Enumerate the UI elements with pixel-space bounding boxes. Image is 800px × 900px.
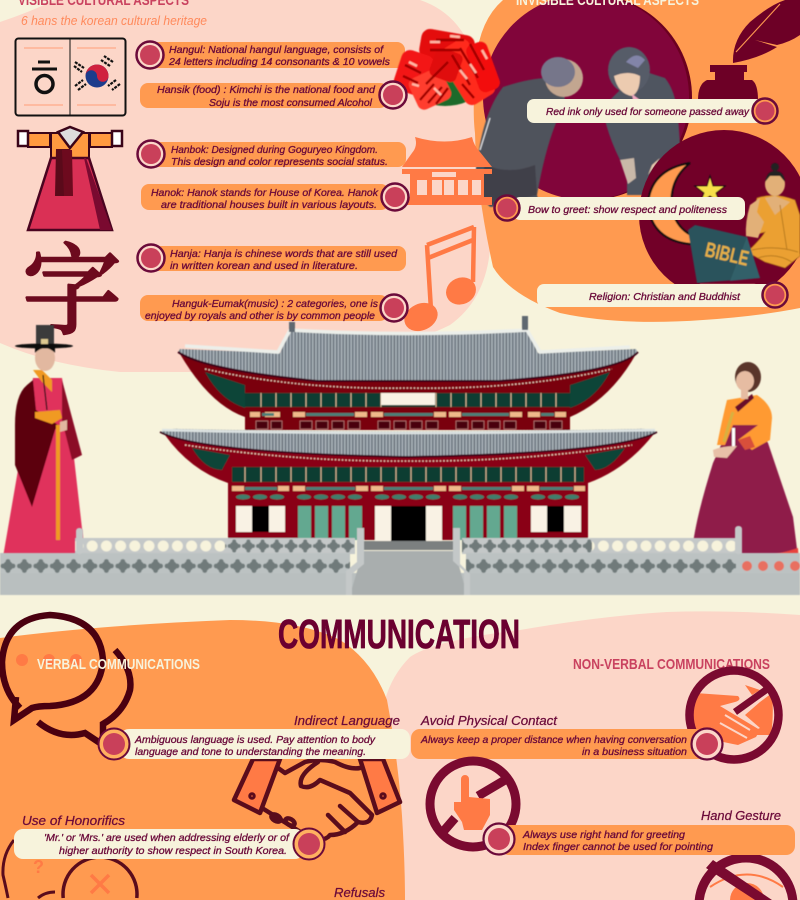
pill: religion bbox=[537, 282, 788, 308]
stair posts bbox=[346, 528, 470, 595]
pill: hanguk-eumak: enjoyed by royals and other is by common people bbox=[145, 310, 375, 322]
pill: hanbok: Hanbok: Designed during Goguryeo Kingdom. bbox=[171, 144, 378, 156]
pill: hanok: are traditional houses built in various layouts. bbox=[161, 199, 377, 211]
lower green frieze bbox=[232, 467, 584, 482]
illustration: woman in hanbok bbox=[690, 362, 799, 566]
pill: hanbok: This design and color represents social status. bbox=[171, 156, 388, 168]
label: use of honorifics: Use of Honorifics bbox=[22, 813, 126, 828]
illustration: man in traditional robe bbox=[3, 325, 85, 570]
upper under-eave bbox=[180, 354, 636, 430]
pill: hanok: Hanok: Hanok stands for House of Korea. Hanok bbox=[151, 187, 379, 199]
upper sign bbox=[381, 393, 435, 405]
icon: question bubble bbox=[3, 840, 137, 898]
stairs bbox=[350, 551, 467, 595]
icon: no eye contact bbox=[695, 853, 797, 900]
label: refusals: Refusals bbox=[334, 885, 386, 900]
pill: bow to greet bbox=[494, 196, 745, 220]
label: avoid physical contact: Avoid Physical Contact bbox=[420, 713, 558, 728]
icon: kimchi bbox=[391, 28, 502, 112]
pill: hanja: Hanja: Hanja is chinese words that are still used bbox=[170, 248, 398, 260]
center door bbox=[375, 506, 391, 541]
icon: crescent bbox=[648, 163, 715, 244]
icon: hanok bbox=[402, 137, 492, 205]
pill: hanja: in written korean and used in literature. bbox=[170, 260, 358, 272]
heading: verbal communications: VERBAL COMMUNICATIONS bbox=[37, 656, 200, 673]
pill: hand gesture bbox=[484, 824, 795, 855]
circle: religion backdrop bbox=[639, 130, 800, 300]
illustration: bowing people bbox=[476, 47, 680, 207]
label: hand gesture: Hand Gesture bbox=[701, 808, 781, 823]
label: indirect language: Indirect Language bbox=[294, 713, 400, 728]
panel: invisible cultural aspects bbox=[474, 0, 800, 322]
icon: music note bbox=[403, 227, 477, 333]
illustration: religion symbols bbox=[648, 163, 800, 290]
icon: question bubble: ? bbox=[33, 857, 44, 877]
green ovals bbox=[236, 494, 579, 500]
icon: buddha bbox=[746, 163, 800, 268]
icon: quill bbox=[733, 0, 800, 63]
pill: hangul: Hangul: National hangul language, consists of bbox=[169, 44, 384, 56]
pill: hansik: Soju is the most consumed Alcohol bbox=[209, 97, 373, 109]
icon: bible bbox=[688, 225, 760, 290]
side windows bbox=[236, 506, 252, 532]
icon: ink bottle bbox=[698, 65, 758, 100]
right person bbox=[605, 47, 680, 195]
pill: avoid physical contact: in a business situation bbox=[582, 746, 687, 758]
lower beam bbox=[232, 486, 585, 491]
icon: star bbox=[695, 176, 725, 203]
pill: hansik: Hansik (food) : Kimchi is the national food and bbox=[157, 84, 376, 96]
illustration: palace bbox=[0, 316, 800, 595]
icon: bible: BIBLE bbox=[703, 238, 751, 271]
roof finials bbox=[289, 316, 528, 332]
panel: verbal communication bbox=[0, 620, 405, 900]
pill: hanguk-eumak: Hanguk-Eumak(music) : 2 categories, one is bbox=[172, 298, 379, 310]
icon: no handshake bbox=[690, 670, 778, 760]
green doors bbox=[298, 506, 517, 540]
pill: use of honorifics bbox=[14, 828, 324, 860]
pill: hanja bbox=[138, 244, 406, 272]
pill: indirect language: Ambiguous language is used. Pay attention to body bbox=[134, 734, 376, 746]
pill: indirect language bbox=[98, 728, 410, 760]
title: COMMUNICATION bbox=[278, 611, 520, 657]
pill: hand gesture: Index finger cannot be used for pointing bbox=[523, 841, 713, 853]
upper balustrade bbox=[75, 538, 355, 554]
pill: red ink: Red ink only used for someone passed away bbox=[546, 106, 750, 118]
pill: use of honorifics: higher authority to show respect in South Korea. bbox=[59, 845, 287, 857]
icon: hanja character: 字 bbox=[22, 237, 122, 348]
pill: bow to greet: Bow to greet: show respect and politeness bbox=[528, 204, 728, 216]
upper beam bbox=[250, 412, 566, 417]
icon: hanbok bbox=[18, 127, 122, 230]
subtitle: six hans: 6 hans the korean cultural heritage bbox=[21, 13, 207, 28]
icon: no pointing bbox=[430, 761, 516, 847]
pill: hansik bbox=[140, 82, 406, 109]
pill: hanok bbox=[141, 184, 408, 211]
pill: hanbok bbox=[138, 140, 406, 168]
pill: indirect language: language and tone to understanding the meaning. bbox=[135, 746, 366, 758]
upper roof bbox=[178, 331, 638, 381]
pill: hangul: 24 letters including 14 consonants & 10 vowels bbox=[168, 56, 391, 68]
pill: hangul bbox=[136, 42, 405, 68]
pill: religion: Religion: Christian and Buddhist bbox=[589, 291, 741, 303]
icon: handshake bbox=[234, 759, 400, 839]
lower under-eave bbox=[165, 435, 653, 540]
pill: hanguk-eumak bbox=[140, 294, 408, 322]
pill: avoid physical contact: Always keep a proper distance when having conversation bbox=[420, 734, 687, 746]
left person bbox=[476, 57, 583, 207]
upper green frieze bbox=[245, 393, 570, 407]
icon: hangul book and flag bbox=[16, 38, 126, 116]
lower roof bbox=[160, 429, 657, 457]
pill: avoid physical contact bbox=[411, 728, 722, 760]
base wall bbox=[0, 573, 800, 595]
panel: non-verbal communication bbox=[385, 611, 800, 900]
pill: use of honorifics: 'Mr.' or 'Mrs.' are used when addressing elderly or of bbox=[44, 832, 290, 844]
icon: speech bubbles bbox=[2, 615, 130, 745]
lower balustrade bbox=[0, 553, 350, 574]
upper small windows bbox=[256, 421, 562, 429]
pill: hand gesture: Always use right hand for greeting bbox=[522, 829, 685, 841]
circle: bowing backdrop bbox=[483, 0, 692, 200]
panel: visible cultural aspects bbox=[0, 0, 490, 372]
pill: red ink bbox=[527, 98, 778, 124]
